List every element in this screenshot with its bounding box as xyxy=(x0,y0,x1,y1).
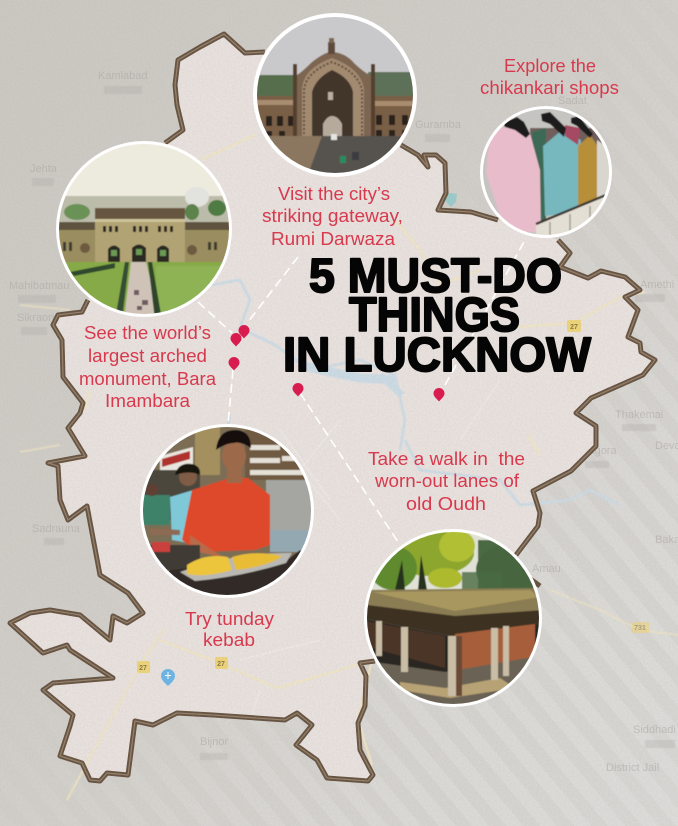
caption: Rumi Darwaza: Rumi Darwaza xyxy=(271,228,396,249)
faded map place labels outside the boundary: Thakemai xyxy=(615,409,663,421)
caption: old Oudh: Take a walk in the xyxy=(368,448,525,469)
icon: teal map pin xyxy=(445,193,457,207)
pin: chikankari shops xyxy=(434,388,444,402)
caption: Bara Imambara: monument, Bara xyxy=(79,368,217,389)
icon: hospital map pin xyxy=(161,669,175,686)
faded map place labels outside the boundary: District Jail xyxy=(606,762,659,774)
pin: Rumi Darwaza xyxy=(238,325,250,338)
caption: Rumi Darwaza: striking gateway, xyxy=(262,205,403,226)
title: 5 MUST-DO xyxy=(309,250,562,303)
map pins xyxy=(228,325,444,402)
caption: tunday kebab: Try tunday xyxy=(185,608,275,629)
caption: chikankari shops: Explore the xyxy=(504,55,596,76)
faded map place labels outside the boundary: Kamlabad xyxy=(98,70,148,82)
road shield: 731: 731 xyxy=(634,625,646,632)
pin: Bara Imambara xyxy=(230,333,242,346)
faded map place labels outside the boundary: Amethi xyxy=(640,279,674,291)
faded map place labels outside the boundary: Bhagora xyxy=(575,445,617,457)
caption: Rumi Darwaza: Visit the city’s xyxy=(278,183,390,204)
faded map place labels outside the boundary: Amau xyxy=(532,563,561,575)
faded map place labels outside the boundary: Mahibatmau xyxy=(9,280,70,292)
title: THINGS xyxy=(349,289,520,342)
map roads and rivers xyxy=(20,135,678,800)
road shield: 27 south east: 27 xyxy=(217,661,225,668)
faded map place labels outside the boundary: Sadrauna xyxy=(32,523,81,535)
title: IN LUCKNOW xyxy=(283,329,592,382)
photo circle: Rumi Darwaza xyxy=(250,10,420,180)
caption: Bara Imambara xyxy=(79,322,217,411)
faded map place labels outside the boundary: Sikraori xyxy=(17,312,54,324)
faded map place labels outside the boundary: Guramba xyxy=(415,119,462,131)
caption: old Oudh: old Oudh xyxy=(406,493,486,514)
road shield: 27 south east xyxy=(215,657,228,669)
caption: Rumi Darwaza xyxy=(262,183,403,249)
caption: tunday kebab xyxy=(185,608,275,650)
caption: chikankari shops xyxy=(480,55,619,98)
photo circle: tunday kebab xyxy=(140,424,316,600)
faded map place labels outside the boundary: Siddhadi xyxy=(633,724,676,736)
title xyxy=(283,250,592,382)
faded map place labels outside the boundary: Jehta xyxy=(30,163,58,175)
caption: Bara Imambara: largest arched xyxy=(88,345,207,366)
faded map place labels outside the boundary: Sadat xyxy=(558,95,587,107)
road shield: 27 north xyxy=(567,320,581,332)
caption: tunday kebab: kebab xyxy=(203,629,255,650)
caption: Bara Imambara: See the world’s xyxy=(84,322,211,343)
pin: old Oudh xyxy=(292,383,304,396)
textured paper background xyxy=(246,300,678,826)
road shield labels xyxy=(137,320,649,673)
dashed connector lines xyxy=(198,240,525,545)
photo circle: old Oudh ruins xyxy=(360,525,545,710)
faded map place labels outside the boundary: Bijnor xyxy=(200,736,228,748)
caption: old Oudh: worn-out lanes of xyxy=(374,470,520,491)
caption: old Oudh xyxy=(368,448,525,514)
road shield: 731 xyxy=(632,622,649,633)
caption: Bara Imambara: Imambara xyxy=(105,390,191,411)
pin: tunday kebab xyxy=(228,357,240,370)
photo circle: chikankari shop xyxy=(480,105,615,240)
road shield: 27 south west: 27 xyxy=(139,665,147,672)
caption: chikankari shops: chikankari shops xyxy=(480,77,619,98)
photo circle: Bara Imambara xyxy=(55,140,236,322)
road shield: 27 north: 27 xyxy=(570,324,578,331)
road shield: 27 south west xyxy=(137,661,150,673)
